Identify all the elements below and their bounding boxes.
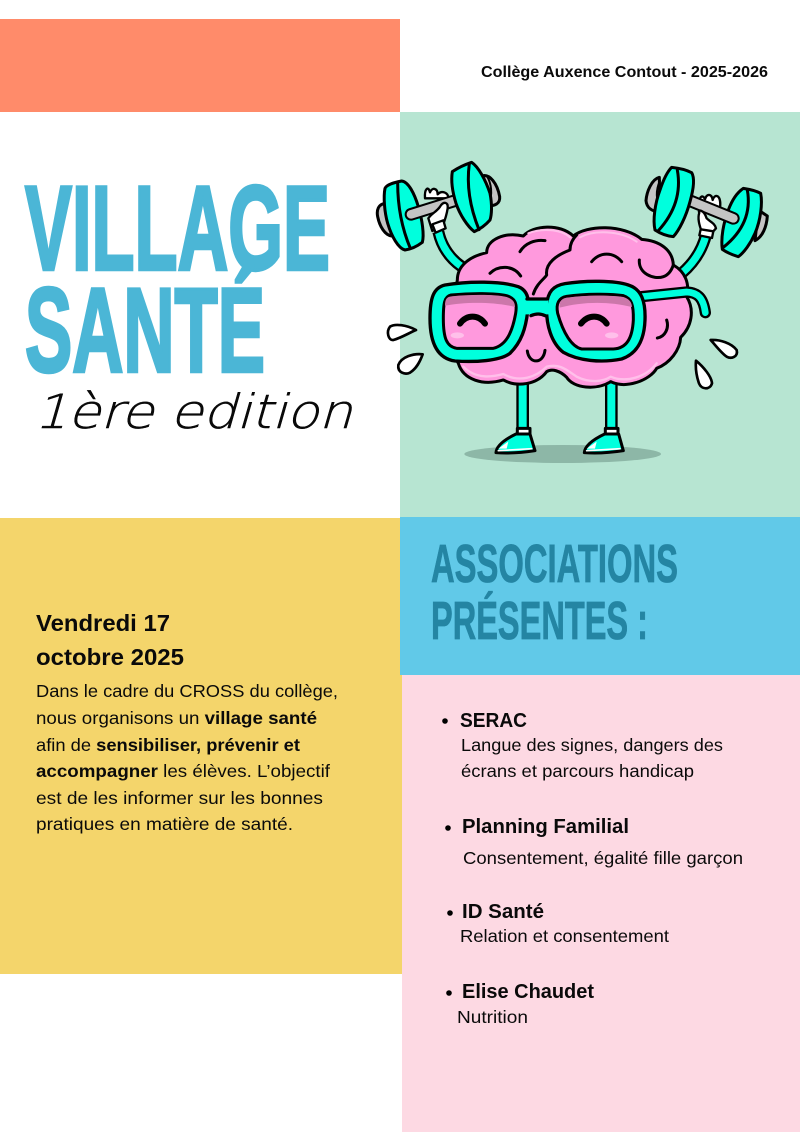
right plate bbox=[452, 162, 492, 232]
association: Planning Familial: Consentement, égalité fille garçon bbox=[463, 848, 743, 868]
fingers bbox=[425, 189, 448, 198]
glasses bbox=[430, 281, 645, 361]
illustration: brain lifting dumbbells bbox=[377, 162, 767, 463]
left dumbbell bbox=[377, 162, 500, 250]
associations heading: PRÉSENTES : bbox=[431, 591, 648, 651]
panel: yellow event details background bbox=[0, 518, 402, 974]
right cap bbox=[480, 176, 500, 206]
association: ID Santé: Relation et consentement bbox=[460, 926, 669, 946]
right dumbbell bbox=[646, 167, 767, 257]
right plate bbox=[722, 188, 761, 257]
event description: accompagner les élèves. L’objectif bbox=[36, 761, 330, 781]
glove bbox=[699, 211, 716, 235]
panel: orange header block bbox=[0, 19, 400, 112]
ground shadow bbox=[464, 445, 661, 463]
face: eyes, cheeks and smile bbox=[451, 317, 618, 361]
association: Planning Familial: Planning Familial bbox=[462, 816, 629, 838]
right lens bbox=[557, 294, 633, 349]
glasses temple bbox=[642, 292, 705, 313]
bar bbox=[687, 199, 733, 218]
title: VILLAGE bbox=[25, 162, 330, 296]
lens shading bbox=[445, 295, 515, 307]
brain bbox=[452, 227, 691, 387]
title: SANTÉ bbox=[25, 264, 265, 398]
association: ID Santé bbox=[447, 901, 669, 946]
event description: Dans le cadre du CROSS du collège, bbox=[36, 681, 338, 701]
bridge bbox=[525, 298, 549, 314]
event date: Vendredi 17 bbox=[36, 610, 170, 636]
sweat drops bbox=[388, 325, 737, 388]
shoes bbox=[496, 428, 623, 453]
panel: mint illustration background bbox=[400, 112, 800, 518]
association: Elise Chaudet bbox=[446, 981, 594, 1027]
association: SERAC: SERAC bbox=[460, 710, 527, 732]
right frame bbox=[547, 281, 645, 361]
glove bbox=[428, 203, 448, 231]
left frame bbox=[430, 282, 528, 361]
associations heading bbox=[431, 534, 678, 651]
event description: nous organisons un village santé bbox=[36, 708, 317, 728]
association: SERAC: écrans et parcours handicap bbox=[461, 761, 694, 781]
right cap bbox=[755, 210, 767, 241]
left lens bbox=[443, 294, 516, 348]
event description: pratiques en matière de santé. bbox=[36, 814, 293, 834]
event date bbox=[36, 610, 184, 670]
bar bbox=[411, 201, 455, 214]
panel: pink associations list background bbox=[402, 675, 800, 1132]
event description: afin de sensibiliser, prévenir et bbox=[36, 735, 300, 755]
subtitle: 1ère edition: 1ère edition bbox=[31, 385, 364, 440]
association: Elise Chaudet: Nutrition bbox=[457, 1007, 528, 1027]
event date: octobre 2025 bbox=[36, 644, 184, 670]
association: ID Santé: ID Santé bbox=[462, 901, 544, 923]
legs bbox=[523, 380, 611, 430]
event description bbox=[36, 681, 338, 834]
school and year header: Collège Auxence Contout - 2025-2026 bbox=[481, 64, 768, 81]
association: Planning Familial bbox=[445, 816, 743, 868]
left cap bbox=[377, 203, 392, 236]
association: SERAC bbox=[442, 710, 723, 781]
left plate bbox=[384, 181, 423, 250]
left plate bbox=[654, 167, 693, 237]
association: Elise Chaudet: Elise Chaudet bbox=[462, 981, 594, 1003]
title bbox=[25, 162, 330, 398]
panel: blue associations heading background bbox=[400, 517, 800, 675]
fingers bbox=[699, 195, 720, 208]
arms bbox=[438, 232, 706, 273]
event description: est de les informer sur les bonnes bbox=[36, 788, 323, 808]
association: SERAC: Langue des signes, dangers des bbox=[461, 735, 723, 755]
left cap bbox=[646, 177, 660, 212]
